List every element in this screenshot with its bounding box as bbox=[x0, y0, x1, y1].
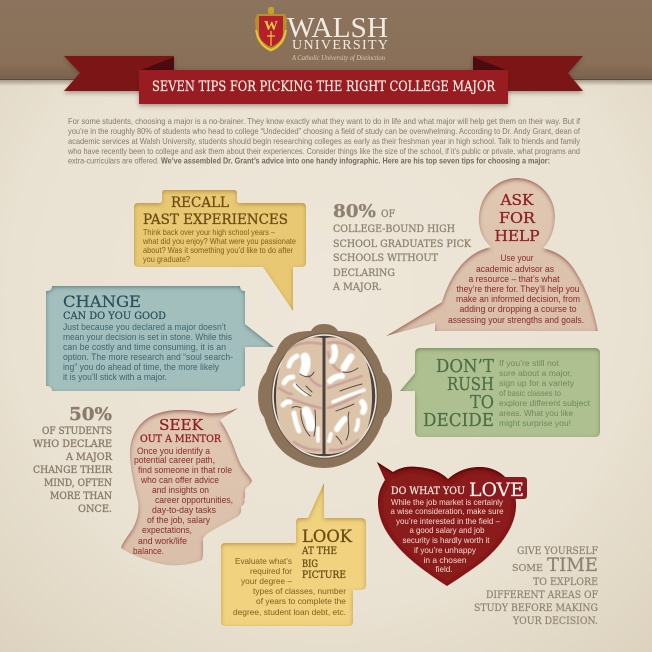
body text: balance. bbox=[133, 546, 164, 556]
body text: they’re there for. They’ll help you bbox=[456, 284, 580, 294]
callout: give yourself some time: SOME bbox=[512, 563, 543, 574]
statistic: 50 percent: OF STUDENTS bbox=[42, 425, 112, 437]
heading: ASK bbox=[499, 191, 534, 209]
icon: university crest: W bbox=[264, 19, 278, 34]
body text: potential career path, bbox=[134, 455, 215, 465]
body text bbox=[448, 253, 584, 325]
heading: AT THE bbox=[301, 546, 337, 557]
callout: give yourself some time: YOUR DECISION. bbox=[512, 615, 598, 627]
body text bbox=[142, 227, 296, 264]
statistic: 50 percent: 50% bbox=[69, 404, 112, 425]
callout: give yourself some time: TO EXPLORE bbox=[533, 576, 598, 588]
body text: areas. What you like bbox=[499, 408, 573, 418]
heading: FOR bbox=[499, 209, 536, 227]
body text bbox=[390, 497, 504, 574]
statistic: 80 percent bbox=[332, 201, 471, 293]
panel: seek out a mentor bbox=[121, 408, 252, 565]
left hemisphere bbox=[276, 337, 322, 454]
body text: might surprise you! bbox=[499, 418, 571, 428]
body text: assessing your strengths and goals. bbox=[448, 315, 584, 325]
heading: BIG bbox=[302, 559, 318, 570]
body text: career opportunities, bbox=[155, 495, 233, 505]
header band bbox=[0, 0, 652, 86]
body text: who can offer advice bbox=[140, 475, 219, 485]
body text: of basic classes to bbox=[499, 388, 561, 398]
body text: mean your decision is set in stone. While this bbox=[63, 332, 232, 342]
panel: change can do you good bbox=[46, 286, 274, 391]
body text: of years to complete the bbox=[256, 596, 346, 606]
ribbon tails bbox=[64, 56, 583, 91]
body text: While the job market is certainly bbox=[391, 497, 504, 507]
body text: Evaluate what’s bbox=[235, 556, 292, 566]
body text: Once you identify a bbox=[137, 446, 210, 456]
intro paragraph: For some students, choosing a major is a no-brainer. They know exactly what they want to do in life and what major will help get them on their way. But if bbox=[68, 117, 581, 126]
heading: HELP bbox=[494, 227, 540, 245]
body text: Use your bbox=[500, 253, 534, 263]
statistic: 80 percent: A MAJOR. bbox=[332, 281, 382, 293]
statistic: 50 percent: ONCE. bbox=[78, 503, 112, 515]
body text bbox=[499, 358, 591, 428]
body text: explore different subject bbox=[499, 398, 591, 408]
body text: you’re interested in the field – bbox=[396, 516, 500, 526]
panel: don't rush to decide bbox=[400, 348, 600, 437]
heading: SEEK bbox=[159, 416, 204, 434]
statistic: 80 percent: SCHOOLS WITHOUT bbox=[333, 252, 438, 264]
body text: academic advisor as bbox=[476, 264, 555, 274]
body text: it is you’ll stick with a major. bbox=[63, 372, 167, 382]
body text: sure about a major, bbox=[499, 368, 572, 378]
body text: degree, student loan debt, etc. bbox=[233, 607, 346, 617]
statistic: 50 percent: CHANGE THEIR bbox=[33, 464, 113, 476]
panel: do what you love bbox=[377, 462, 527, 586]
statistic: 50 percent bbox=[33, 404, 113, 515]
body text: security is hardly worth it bbox=[402, 535, 490, 545]
panel: look at the big picture bbox=[221, 483, 366, 626]
intro paragraph: We’ve assembled Dr. Grant’s advice into one handy infographic. Here are his top seven tips for choosing a major: bbox=[161, 156, 550, 166]
body text: a resource – that’s what bbox=[468, 274, 560, 284]
heading bbox=[140, 416, 221, 445]
body text: your degree – bbox=[241, 576, 292, 586]
statistic: 50 percent: A MAJOR bbox=[65, 451, 113, 463]
body text: and work/life bbox=[138, 536, 187, 546]
heading bbox=[143, 195, 288, 228]
heading: PAST EXPERIENCES bbox=[143, 212, 288, 228]
heading: DECIDE bbox=[423, 410, 494, 431]
body text: Think back over your high school years – bbox=[143, 227, 275, 237]
statistic: 80 percent: SCHOOL GRADUATES PICK bbox=[333, 238, 471, 250]
body text: about? Was it something you’d like to do after bbox=[143, 245, 293, 255]
heading: DO WHAT YOU bbox=[391, 486, 465, 497]
statistic: 50 percent: MIND, OFTEN bbox=[44, 477, 112, 489]
heading bbox=[423, 356, 494, 431]
intro paragraph: who have recently been to college and ask them about their experiences. Consider things like the size of the school, if it’s public or private, what programs and bbox=[67, 147, 580, 156]
heading: RECALL bbox=[171, 195, 229, 211]
statistic: 80 percent: 80% bbox=[333, 201, 376, 222]
heading bbox=[63, 292, 166, 322]
heading: PICTURE bbox=[302, 570, 346, 581]
heading: OUT A MENTOR bbox=[140, 434, 221, 445]
title: SEVEN TIPS FOR PICKING THE RIGHT COLLEGE MAJOR bbox=[152, 79, 495, 95]
body text: option. The more research and “soul search- bbox=[63, 352, 233, 362]
body text bbox=[63, 322, 233, 382]
panel: ask for help bbox=[386, 178, 598, 336]
illustration: brain bbox=[258, 324, 392, 468]
body text: If you’re still not bbox=[499, 358, 560, 368]
body text: you graduate? bbox=[143, 254, 190, 264]
heading bbox=[391, 479, 524, 501]
intro paragraph bbox=[67, 117, 581, 166]
intro paragraph: academic services at Walsh University, students should begin researching colleges as early as their freshman year in high school. Talk to friends and family bbox=[68, 137, 581, 146]
body text: Just because you declared a major doesn’t bbox=[63, 322, 226, 332]
logo: Walsh University bbox=[255, 7, 388, 62]
heading: LOVE bbox=[469, 479, 524, 501]
body text: a good salary and job bbox=[410, 525, 485, 535]
right hemisphere bbox=[326, 337, 372, 454]
statistic: 50 percent: MORE THAN bbox=[50, 490, 112, 502]
statistic: 80 percent: COLLEGE-BOUND HIGH bbox=[333, 223, 455, 235]
body text bbox=[233, 556, 346, 617]
body text: of the job, salary bbox=[147, 515, 211, 525]
body text: can be costly and time consuming, it is an bbox=[63, 342, 226, 352]
body text: required for bbox=[250, 566, 292, 576]
body text: in a chosen bbox=[424, 555, 467, 565]
body text: types of classes, number bbox=[253, 586, 346, 596]
body text: field. bbox=[436, 564, 452, 574]
body text: day-to-day tasks bbox=[152, 505, 217, 515]
body text: adding or dropping a course to bbox=[460, 304, 577, 314]
heading: CAN DO YOU GOOD bbox=[63, 311, 166, 322]
intro paragraph: extra-curriculars are offered. bbox=[68, 156, 159, 166]
wordmark: A Catholic University of Distinction bbox=[291, 54, 385, 62]
callout: give yourself some time: STUDY BEFORE MAKING bbox=[474, 602, 598, 614]
callout: give yourself some time: GIVE YOURSELF bbox=[517, 545, 598, 557]
body text bbox=[133, 446, 233, 556]
panel: recall past experiences bbox=[134, 190, 306, 311]
body text: a wise consideration, make sure bbox=[390, 506, 504, 516]
heading: LOOK bbox=[302, 527, 352, 547]
body text: and insights on bbox=[152, 485, 209, 495]
heading: CHANGE bbox=[63, 292, 141, 311]
body text: what did you enjoy? What were you passionate bbox=[142, 236, 296, 246]
title ribbon bbox=[64, 56, 583, 104]
wordmark: UNIVERSITY bbox=[292, 38, 388, 53]
body text: make an informed decision, from bbox=[456, 294, 580, 304]
body text: if you’re unhappy bbox=[414, 545, 477, 555]
heading bbox=[494, 191, 540, 245]
body text: ing” you do ahead of time, the more likely bbox=[63, 362, 219, 372]
label tab: love bbox=[467, 477, 527, 499]
callout: give yourself some time: DIFFERENT AREAS OF bbox=[486, 589, 598, 601]
callout: give yourself some time: TIME bbox=[547, 554, 598, 576]
wordmark bbox=[287, 12, 388, 62]
heading: RUSH bbox=[447, 374, 494, 395]
body text: find someone in that role bbox=[138, 465, 232, 475]
statistic: 80 percent: DECLARING bbox=[333, 267, 395, 279]
body text: expectations, bbox=[142, 525, 192, 535]
intro paragraph: you’re in the roughly 80% of students who head to college “Undecided” choosing a field of study can be overwhelming. According to Dr. Andy Grant, dean of bbox=[68, 127, 581, 136]
callout: give yourself some time bbox=[474, 545, 598, 627]
body text: sign up for a variety bbox=[499, 378, 575, 388]
heading: TO bbox=[470, 392, 494, 413]
wordmark: WALSH bbox=[287, 12, 388, 44]
statistic: 50 percent: WHO DECLARE bbox=[33, 438, 112, 450]
heading: DON’T bbox=[436, 356, 494, 377]
heading bbox=[301, 527, 352, 581]
statistic: 80 percent: OF bbox=[381, 208, 395, 220]
